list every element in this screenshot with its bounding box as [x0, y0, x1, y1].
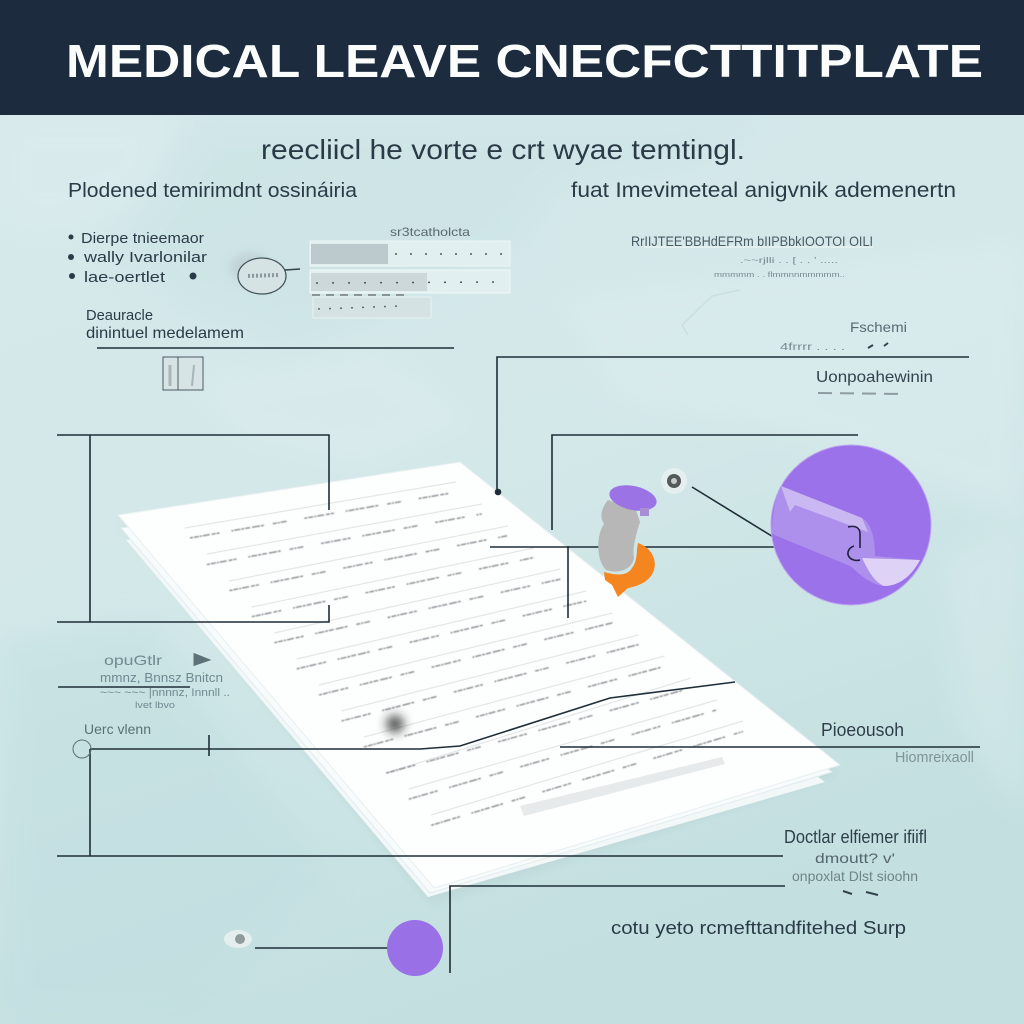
right details block [631, 233, 873, 279]
lower right labels: Hiomreixaoll [895, 749, 974, 766]
left caption block [86, 307, 244, 342]
pale map contour [682, 290, 740, 335]
upper right labels: 4frrrr . . . . [780, 342, 845, 353]
lower right labels [821, 720, 974, 766]
purple circle marker [387, 920, 443, 976]
subtitle: reecliicl he vorte e crt wyae temtingl. [261, 134, 745, 165]
doctor note block: Doctlar elfiemer ifiifl [784, 827, 927, 847]
bullet list: lae-oertlet [84, 269, 166, 286]
left lower label block: mmnz, Bnnsz Bnitcn [100, 670, 223, 685]
small table panel [310, 225, 510, 318]
document form lines [185, 482, 743, 815]
icon: person figure with cap and orange band [598, 481, 659, 597]
bullet list: Dierpe tnieemaor [81, 230, 204, 247]
left lower label block [100, 652, 230, 710]
grey highlight bar [520, 757, 725, 816]
left lower label block: lvet lbvo [135, 700, 175, 710]
bullet list: wally Ivarlonilar [83, 249, 207, 266]
connector lines [57, 348, 980, 973]
bullet list [68, 230, 207, 286]
bottom caption: cotu yeto rcmefttandfitehed Surp [611, 918, 906, 938]
title text: MEDICAL LEAVE CNECFCTTITPLATE [66, 35, 983, 87]
doctor note block: onpoxlat Dlst sioohn [792, 868, 918, 884]
doctor note block: dmoutt? v' [815, 850, 895, 866]
top sheet [118, 462, 840, 888]
lower left label: Uerc vlenn [84, 721, 151, 737]
document stack [118, 462, 840, 905]
document text lines [190, 492, 743, 825]
icon: purple pen circle [771, 445, 931, 605]
icon: table callout bubble [230, 253, 300, 294]
left caption block: Deauracle [86, 307, 153, 324]
upper right labels [780, 319, 933, 394]
upper right labels: Fschemi [850, 319, 907, 335]
left lower label block: ~~~ ~~~ |nnnnz, Innnll .. [100, 687, 230, 699]
right details block: RrIIJTEE'BBHdEFRm bIIPBbkIOOTOI OILI [631, 233, 873, 249]
right details block: .~~rjlli . . [ . . ' ..... [740, 256, 838, 265]
icon: small document box [163, 357, 203, 390]
left caption block: dinintuel medelamem [86, 325, 244, 342]
small table panel: sr3tcatholcta [390, 225, 470, 239]
title banner [0, 0, 1024, 115]
icon: small circled marker [73, 740, 91, 758]
lower right labels: Pioeousoh [821, 720, 904, 740]
doctor note block [784, 827, 948, 895]
right section heading: fuat Imevimeteal anigvnik ademenertn [571, 179, 956, 202]
smudge dot [386, 715, 404, 733]
icon: small bottom seal [224, 930, 252, 948]
left lower label block: opuGtlr [104, 652, 162, 668]
left section heading: Plodened temirimdnt ossináiria [68, 180, 358, 202]
right details block: mmmmm . . flmmnnmmmmm.. [714, 272, 845, 279]
upper right labels: Uonpoahewinin [816, 369, 933, 386]
icon: small seal [661, 468, 687, 494]
